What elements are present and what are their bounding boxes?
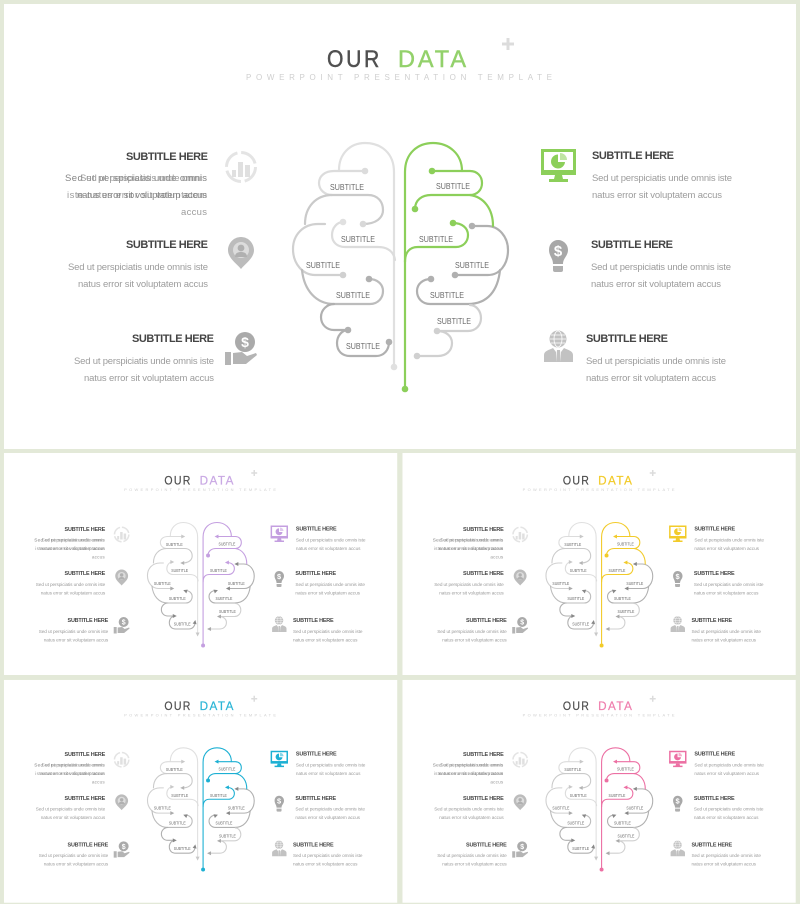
right block 1 xyxy=(296,752,366,776)
right block 1: natus error sit voluptatem accus xyxy=(296,546,361,552)
icon: monitor xyxy=(669,526,686,542)
brain diagram xyxy=(546,748,653,872)
right block 2 xyxy=(591,239,731,290)
left block 1 xyxy=(34,752,106,784)
brain diagram: SUBTITLE xyxy=(564,542,581,547)
right block 3 xyxy=(293,618,363,644)
icon: location pin xyxy=(228,237,254,269)
left block 1: natus error sit voluptatem accus xyxy=(40,771,105,776)
left block 2 xyxy=(434,571,504,597)
left block 1: iste natus error sit voluptatem xyxy=(35,546,105,552)
brain diagram: SUBTITLE xyxy=(617,767,634,772)
brain diagram: SUBTITLE xyxy=(609,793,626,798)
icon: hand with coin xyxy=(114,841,130,858)
right block 2: SUBTITLE HERE xyxy=(694,796,735,802)
left block 2: Sed ut perspiciatis unde omnis iste xyxy=(434,807,504,812)
left block 3: SUBTITLE HERE xyxy=(132,333,214,345)
right block 1 xyxy=(694,752,764,776)
left block 2 xyxy=(434,796,504,820)
left block 1: Sed ut perspiciatis unde omnis xyxy=(80,173,207,184)
brain diagram: SUBTITLE xyxy=(171,568,188,573)
right block 1: Sed ut perspiciatis unde omnis iste xyxy=(296,537,366,544)
brain diagram: SUBTITLE xyxy=(419,234,453,244)
right block 1: Sed ut perspiciatis unde omnis iste xyxy=(694,763,764,768)
left block 1: accus xyxy=(490,779,504,784)
brain diagram: SUBTITLE xyxy=(626,581,643,586)
left block 2 xyxy=(36,796,106,820)
icon: businessman globe xyxy=(544,330,573,362)
panel: blue slide xyxy=(4,680,397,903)
left block 1: Sed ut perspiciatis unde omnis xyxy=(42,537,105,544)
brain diagram xyxy=(147,522,254,648)
right block 2: Sed ut perspiciatis unde omnis iste xyxy=(295,807,365,812)
icon: light bulb xyxy=(275,796,284,812)
left block 1: Sed ut perspiciatis unde omnis xyxy=(440,763,504,768)
icon: monitor xyxy=(669,751,686,767)
left block 1: SUBTITLE HERE xyxy=(65,527,106,533)
left block 1: Sed ut perspiciatis unde omnis xyxy=(42,763,105,768)
left block 1: iste natus error sit voluptatem xyxy=(434,771,503,776)
title: DATA xyxy=(200,699,235,713)
brain diagram: SUBTITLE xyxy=(174,621,191,627)
left block 1: Sed ut perspiciatis unde omnis xyxy=(34,763,105,768)
left block 3 xyxy=(39,842,109,867)
right block 2: SUBTITLE HERE xyxy=(295,796,337,802)
brain diagram: SUBTITLE xyxy=(626,806,643,811)
brain diagram: SUBTITLE xyxy=(219,609,236,614)
left block 1: natus error sit voluptatem accus xyxy=(40,546,105,552)
right block 2: SUBTITLE HERE xyxy=(295,571,336,577)
icon: chart ring xyxy=(513,527,527,542)
brain diagram: SUBTITLE xyxy=(572,621,589,627)
title xyxy=(327,46,469,73)
brain diagram: SUBTITLE xyxy=(617,833,635,838)
subtitle: POWERPOINT PRESENTATION TEMPLATE xyxy=(523,487,675,492)
right block 1: Sed ut perspiciatis unde omnis iste xyxy=(296,763,366,768)
brain diagram: SUBTITLE xyxy=(174,846,191,851)
title: OUR xyxy=(164,699,192,713)
left block 3: SUBTITLE HERE xyxy=(466,618,507,624)
left block 1: SUBTITLE HERE xyxy=(126,151,208,163)
brain diagram: SUBTITLE xyxy=(617,541,634,547)
brain diagram: SUBTITLE xyxy=(169,821,186,826)
right block 3: Sed ut perspiciatis unde omnis iste xyxy=(691,629,761,635)
right block 1 xyxy=(694,526,764,552)
left block 1: Sed ut perspiciatis unde omnis xyxy=(34,537,105,544)
left block 2: SUBTITLE HERE xyxy=(463,796,504,802)
icon: plus xyxy=(650,696,656,702)
right block 2 xyxy=(694,796,764,820)
left block 2: Sed ut perspiciatis unde omnis iste xyxy=(36,807,106,812)
left block 3: natus error sit voluptatem accus xyxy=(44,637,109,644)
title: DATA xyxy=(398,46,469,73)
right block 3: natus error sit voluptatem accus xyxy=(293,637,358,644)
left block 1: iste natus error sit voluptatem xyxy=(434,546,503,552)
icon: chart ring xyxy=(114,527,129,542)
brain diagram: SUBTITLE xyxy=(564,767,581,772)
title: OUR xyxy=(327,46,382,73)
title xyxy=(164,473,235,488)
right block 1: SUBTITLE HERE xyxy=(296,752,337,758)
right block 2: SUBTITLE HERE xyxy=(591,239,673,251)
left block 1: Sed ut perspiciatis unde omnis xyxy=(433,537,504,544)
brain diagram: SUBTITLE xyxy=(437,316,471,326)
left block 2 xyxy=(68,239,208,290)
icon: plus xyxy=(251,470,257,476)
title: DATA xyxy=(598,699,633,713)
left block 3: SUBTITLE HERE xyxy=(466,842,507,848)
brain diagram: SUBTITLE xyxy=(215,821,233,826)
icon: businessman globe xyxy=(671,841,685,856)
brain diagram: SUBTITLE xyxy=(219,833,236,838)
left block 1: SUBTITLE HERE xyxy=(463,752,504,758)
icon: light bulb xyxy=(549,240,568,272)
brain diagram: SUBTITLE xyxy=(169,596,186,601)
right block 1: natus error sit voluptatem accus xyxy=(694,546,760,552)
left block 1: SUBTITLE HERE xyxy=(463,527,504,533)
left block 3: Sed ut perspiciatis unde omnis iste xyxy=(74,356,214,367)
right block 3: natus error sit voluptatem accus xyxy=(586,373,716,384)
brain diagram: SUBTITLE xyxy=(228,581,245,586)
right block 3: Sed ut perspiciatis unde omnis iste xyxy=(293,853,363,858)
icon: hand with coin xyxy=(225,332,257,365)
right block 2: natus error sit voluptatem accus xyxy=(295,815,361,820)
right block 3: Sed ut perspiciatis unde omnis iste xyxy=(586,356,726,367)
right block 1 xyxy=(592,150,732,201)
left block 2: natus error sit voluptatem accus xyxy=(439,815,504,820)
right block 1: SUBTITLE HERE xyxy=(694,752,736,758)
left block 1: Sed ut perspiciatis unde omnis xyxy=(433,763,504,768)
right block 3: SUBTITLE HERE xyxy=(691,842,733,848)
subtitle: POWERPOINT PRESENTATION TEMPLATE xyxy=(523,713,675,718)
right block 3: natus error sit voluptatem accus xyxy=(293,862,358,867)
icon: hand with coin xyxy=(512,841,528,858)
left block 1: accus xyxy=(490,555,504,561)
left block 1: natus error sit voluptatem accus xyxy=(77,190,207,201)
left block 2 xyxy=(36,571,106,597)
left block 1 xyxy=(433,752,504,784)
right block 2: Sed ut perspiciatis unde omnis iste xyxy=(694,807,764,812)
right block 3 xyxy=(691,842,761,867)
left block 1: Sed ut perspiciatis unde omnis xyxy=(440,537,504,544)
left block 1 xyxy=(65,151,208,218)
brain diagram: SUBTITLE xyxy=(614,821,631,826)
brain diagram xyxy=(293,143,508,392)
icon: plus xyxy=(502,38,514,50)
title: OUR xyxy=(563,473,590,488)
left block 2: Sed ut perspiciatis unde omnis iste xyxy=(68,262,208,273)
right block 2: natus error sit voluptatem accus xyxy=(591,279,721,290)
right block 2 xyxy=(694,571,764,597)
brain diagram: SUBTITLE xyxy=(215,596,233,601)
brain diagram: SUBTITLE xyxy=(552,806,569,811)
title xyxy=(164,699,235,713)
brain diagram: SUBTITLE xyxy=(166,767,183,772)
panel: yellow slide xyxy=(402,453,796,675)
left block 2: natus error sit voluptatem accus xyxy=(41,590,106,597)
brain diagram: SUBTITLE xyxy=(210,568,227,573)
right block 2: Sed ut perspiciatis unde omnis iste xyxy=(295,582,365,588)
subtitle: POWERPOINT PRESENTATION TEMPLATE xyxy=(246,73,552,82)
subtitle: POWERPOINT PRESENTATION TEMPLATE xyxy=(124,713,276,718)
left block 1: iste natus error sit voluptatem xyxy=(35,771,105,776)
left block 3: Sed ut perspiciatis unde omnis iste xyxy=(437,853,507,858)
left block 3 xyxy=(437,618,507,644)
right block 1: natus error sit voluptatem accus xyxy=(592,190,722,201)
icon: monitor xyxy=(271,526,288,542)
brain diagram: SUBTITLE xyxy=(436,181,470,191)
right block 2: Sed ut perspiciatis unde omnis iste xyxy=(591,262,731,273)
icon: light bulb xyxy=(275,571,284,587)
brain diagram: SUBTITLE xyxy=(306,260,340,270)
right block 3: SUBTITLE HERE xyxy=(586,333,668,345)
left block 3 xyxy=(74,333,214,384)
left block 2: SUBTITLE HERE xyxy=(65,796,106,802)
left block 2: SUBTITLE HERE xyxy=(463,571,504,577)
right block 3: SUBTITLE HERE xyxy=(293,618,334,624)
brain diagram: SUBTITLE xyxy=(171,793,188,798)
icon: hand with coin xyxy=(114,617,130,634)
icon: chart ring xyxy=(513,752,527,767)
icon: monitor xyxy=(541,150,576,182)
left block 3: natus error sit voluptatem accus xyxy=(44,862,109,867)
icon: plus xyxy=(650,470,656,476)
left block 3: Sed ut perspiciatis unde omnis iste xyxy=(39,853,109,858)
icon: location pin xyxy=(115,794,128,810)
right block 1: natus error sit voluptatem accus xyxy=(296,771,361,776)
left block 1: accus xyxy=(92,779,105,784)
icon: chart ring xyxy=(226,152,256,182)
right block 3 xyxy=(691,618,761,644)
panel: purple slide xyxy=(4,453,397,675)
left block 3 xyxy=(39,618,109,644)
left block 2: SUBTITLE HERE xyxy=(126,239,208,251)
subtitle: POWERPOINT PRESENTATION TEMPLATE xyxy=(124,487,276,492)
panel: main green slide xyxy=(4,4,796,449)
left block 1: accus xyxy=(92,555,105,561)
brain diagram: SUBTITLE xyxy=(218,541,236,547)
right block 3: SUBTITLE HERE xyxy=(293,842,334,848)
title: DATA xyxy=(598,473,633,488)
right block 2: SUBTITLE HERE xyxy=(694,571,735,577)
right block 1: natus error sit voluptatem accus xyxy=(694,771,760,776)
brain diagram xyxy=(147,748,254,872)
brain diagram: SUBTITLE xyxy=(567,821,584,826)
right block 2: natus error sit voluptatem accus xyxy=(694,590,759,597)
left block 1: SUBTITLE HERE xyxy=(65,752,106,758)
right block 1: SUBTITLE HERE xyxy=(296,526,337,533)
left block 2: natus error sit voluptatem accus xyxy=(41,815,106,820)
title: DATA xyxy=(200,473,235,488)
left block 2: natus error sit voluptatem accus xyxy=(439,590,504,597)
title: OUR xyxy=(164,473,192,488)
left block 3: Sed ut perspiciatis unde omnis iste xyxy=(39,629,109,635)
brain diagram: SUBTITLE xyxy=(346,341,380,351)
left block 3: SUBTITLE HERE xyxy=(68,842,109,848)
brain diagram: SUBTITLE xyxy=(570,793,587,798)
right block 3 xyxy=(586,333,726,384)
brain diagram: SUBTITLE xyxy=(570,568,587,573)
icon: location pin xyxy=(514,794,527,810)
brain diagram: SUBTITLE xyxy=(330,182,364,192)
left block 1: natus error sit voluptatem accus xyxy=(439,546,504,552)
brain diagram: SUBTITLE xyxy=(567,596,584,601)
icon: location pin xyxy=(115,570,128,586)
left block 3 xyxy=(437,842,507,867)
right block 3: SUBTITLE HERE xyxy=(691,618,733,624)
icon: hand with coin xyxy=(512,617,528,634)
icon: businessman globe xyxy=(272,616,286,632)
title: OUR xyxy=(563,699,590,713)
icon: chart ring xyxy=(114,752,129,767)
left block 1: Sed ut perspiciatis unde omnis xyxy=(65,173,207,184)
right block 3: Sed ut perspiciatis unde omnis iste xyxy=(293,629,363,635)
brain diagram: SUBTITLE xyxy=(430,290,464,300)
icon: light bulb xyxy=(673,796,683,812)
brain diagram: SUBTITLE xyxy=(617,609,634,614)
brain diagram: SUBTITLE xyxy=(218,767,236,772)
brain diagram: SUBTITLE xyxy=(228,806,245,811)
left block 2: Sed ut perspiciatis unde omnis iste xyxy=(434,582,504,588)
right block 1 xyxy=(296,526,366,552)
right block 2 xyxy=(295,796,365,820)
icon: businessman globe xyxy=(671,616,685,632)
left block 1 xyxy=(34,527,106,561)
right block 1: Sed ut perspiciatis unde omnis iste xyxy=(592,173,732,184)
brain diagram xyxy=(546,522,653,648)
right block 1: SUBTITLE HERE xyxy=(592,150,674,162)
brain diagram: SUBTITLE xyxy=(336,290,370,300)
right block 3: natus error sit voluptatem accus xyxy=(691,862,757,867)
right block 2: Sed ut perspiciatis unde omnis iste xyxy=(694,582,764,588)
brain diagram: SUBTITLE xyxy=(455,260,489,270)
left block 3: Sed ut perspiciatis unde omnis iste xyxy=(437,629,507,635)
brain diagram: SUBTITLE xyxy=(609,568,626,573)
icon: location pin xyxy=(514,570,527,586)
brain diagram: SUBTITLE xyxy=(572,846,589,851)
right block 1: Sed ut perspiciatis unde omnis iste xyxy=(694,537,764,544)
left block 1: iste natus error sit voluptatem xyxy=(67,190,207,201)
left block 2: natus error sit voluptatem accus xyxy=(78,279,208,290)
left block 1: accus xyxy=(181,207,207,218)
left block 1: natus error sit voluptatem accus xyxy=(439,771,504,776)
brain diagram: SUBTITLE xyxy=(154,806,171,811)
brain diagram: SUBTITLE xyxy=(552,581,569,586)
title xyxy=(563,473,633,488)
title xyxy=(563,699,633,713)
left block 3: SUBTITLE HERE xyxy=(68,618,109,624)
right block 2 xyxy=(295,571,365,597)
icon: light bulb xyxy=(673,571,683,587)
left block 2: SUBTITLE HERE xyxy=(65,571,106,577)
icon: plus xyxy=(251,696,257,702)
right block 1: SUBTITLE HERE xyxy=(694,526,735,533)
panel: pink slide xyxy=(402,680,796,903)
brain diagram: SUBTITLE xyxy=(166,542,183,547)
brain diagram: SUBTITLE xyxy=(614,596,631,601)
right block 2: natus error sit voluptatem accus xyxy=(694,815,759,820)
right block 3: Sed ut perspiciatis unde omnis iste xyxy=(691,853,761,858)
left block 3: natus error sit voluptatem accus xyxy=(442,862,507,867)
right block 3: natus error sit voluptatem accus xyxy=(691,637,757,644)
icon: monitor xyxy=(271,751,288,767)
left block 2: Sed ut perspiciatis unde omnis iste xyxy=(36,582,106,588)
left block 3: natus error sit voluptatem accus xyxy=(84,373,214,384)
right block 3 xyxy=(293,842,363,867)
left block 1 xyxy=(433,527,504,561)
brain diagram: SUBTITLE xyxy=(341,234,375,244)
brain diagram: SUBTITLE xyxy=(154,581,171,586)
brain diagram: SUBTITLE xyxy=(210,793,227,798)
right block 2: natus error sit voluptatem accus xyxy=(295,590,361,597)
icon: businessman globe xyxy=(272,841,286,856)
left block 3: natus error sit voluptatem accus xyxy=(442,637,507,644)
